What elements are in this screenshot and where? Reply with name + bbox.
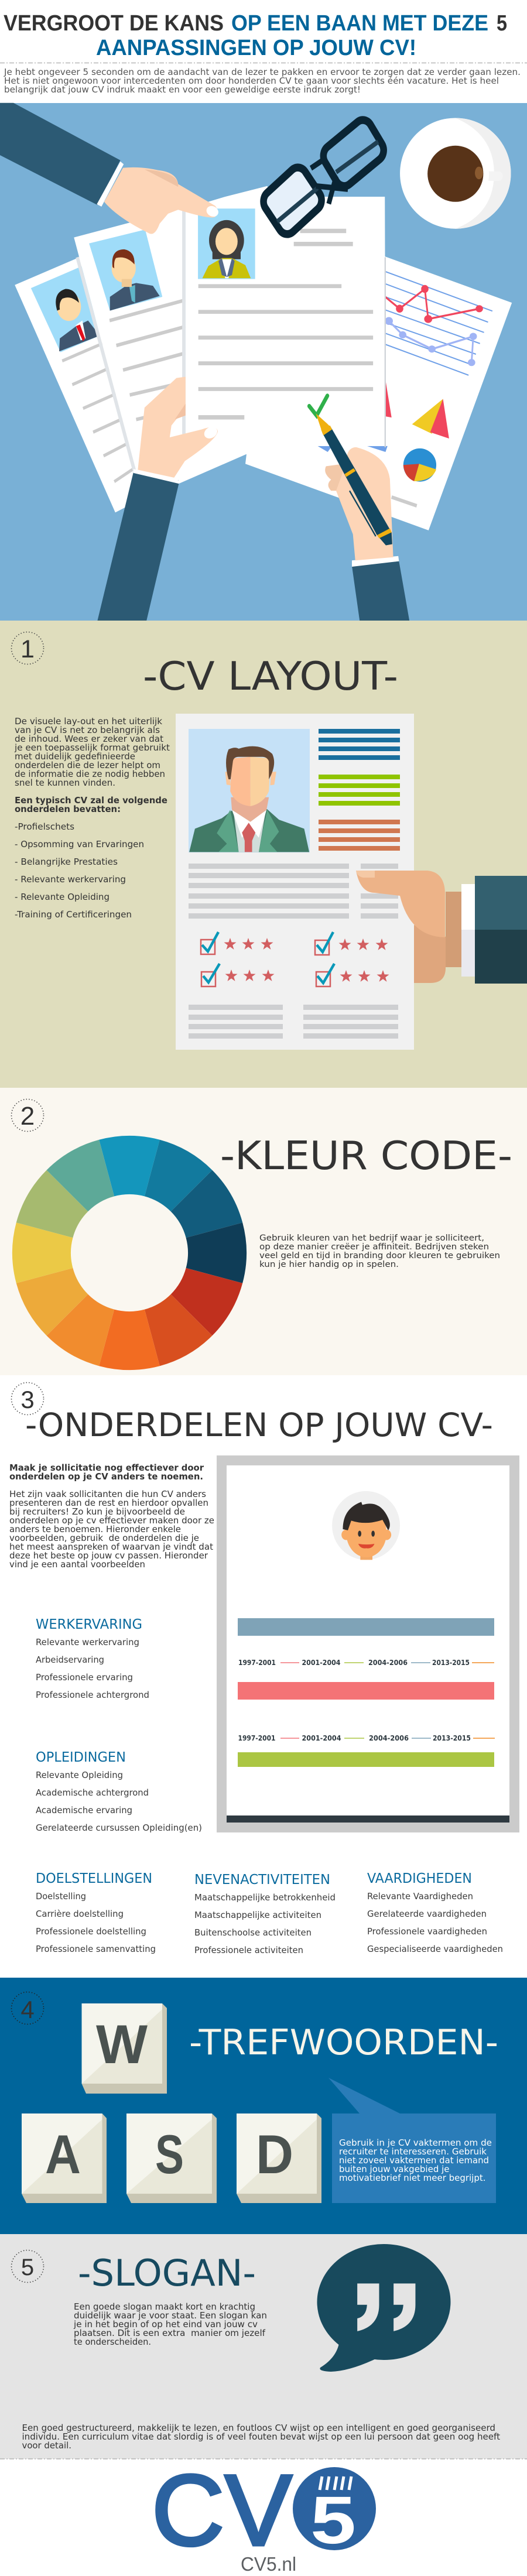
- text block: slogan: plaatsen. Dit is een extra manier om jezelf: [74, 2328, 266, 2338]
- timeline 2: 2001-2004: [302, 1734, 341, 1742]
- text block: layout intro: -Profielschets: [15, 821, 74, 832]
- heading: onderdelen: -ONDERDELEN OP JOUW CV-: [25, 1406, 493, 1444]
- number badge 4: 4: [20, 1996, 35, 2023]
- number badge 3: [12, 1383, 43, 1414]
- text block: layout intro: je een toepasselijk format gebruikt: [14, 742, 170, 753]
- icon: avatar: [332, 1491, 400, 1560]
- text block: onderdelen intro: voorbeelden, gebruik de onderdelen die je: [9, 1533, 199, 1543]
- icon: glasses: [260, 116, 387, 239]
- text block: colour advice: Gebruik kleuren van het bedrijf waar je solliciteert,: [259, 1234, 484, 1243]
- paper: right chart sheet: [245, 256, 512, 530]
- timeline 2: 2004-2006: [369, 1734, 409, 1742]
- panel: section 4 trefwoorden: [0, 1978, 527, 2234]
- icon: speech bubble with quotes: [317, 2244, 451, 2372]
- text block: layout intro: onderdelen bevatten:: [15, 804, 121, 814]
- intro text: [4, 67, 521, 95]
- text block: layout intro: onderdelen die de lezer helpt om: [15, 760, 160, 770]
- text block: onderdelen intro: onderdelen op je CV anders te noemen.: [9, 1471, 203, 1482]
- list: doelstellingen: [36, 1871, 156, 1954]
- paper: main CV sheet: [174, 186, 386, 484]
- title: VERGROOT DE KANS: [4, 11, 224, 36]
- hand: pointing from top left: [0, 103, 220, 234]
- text block: layout intro: -Training of Certificeringen: [15, 909, 132, 920]
- text block: onderdelen intro: vind je een aantal voorbeelden: [9, 1559, 145, 1570]
- text block: onderdelen intro: deze het beste op jouw cv passen. Hieronder: [9, 1550, 208, 1561]
- number badge 5: [12, 2250, 43, 2282]
- panel: section 3 onderdelen: [9, 1383, 519, 1955]
- portrait: man in green suit: [189, 729, 310, 852]
- text block: layout intro: de informatie die ze nodig hebben: [15, 769, 165, 779]
- list: nevenactiviteiten: Buitenschoolse activiteiten: [194, 1927, 312, 1938]
- text block: onderdelen intro: anders te benoemen. Hieronder enkele: [9, 1524, 181, 1534]
- text block: slogan: duidelijk waar je voor staat. Een slogan kan: [74, 2310, 267, 2321]
- text block: layout intro: De visuele lay-out en het uiterlijk: [15, 716, 162, 727]
- paper: middle CV: [74, 208, 186, 471]
- text block: layout intro: de inhoud. Wees er zeker van dat: [15, 734, 163, 744]
- key D: D: [256, 2123, 293, 2185]
- icon: coffee cup: [400, 118, 511, 229]
- title: 5: [497, 11, 507, 36]
- number badge 1: 1: [20, 635, 35, 663]
- key D: [237, 2113, 321, 2203]
- colored text bars: [319, 729, 400, 851]
- callout: vaktermen: [328, 2078, 496, 2203]
- text block: layout intro: - Relevante Opleiding: [15, 892, 109, 902]
- text block: layout intro: - Belangrijke Prestaties: [15, 857, 118, 867]
- intro text: Je hebt ongeveer 5 seconden om de aandacht van de lezer te pakken en ervoor te zorgen dat ze verder gaan lezen.: [4, 67, 521, 77]
- list: opleidingen: [36, 1750, 202, 1833]
- heading: slogan: -SLOGAN-: [78, 2252, 256, 2294]
- text block: onderdelen intro: onderdelen op je cv effectiever maken door ze: [9, 1515, 214, 1526]
- timeline 1: 1997-2001: [238, 1658, 276, 1667]
- logo: CV5: C: [152, 2454, 224, 2567]
- list: nevenactiviteiten: Maatschappelijke betrokkenheid: [194, 1892, 336, 1903]
- text block: slogan: [73, 2301, 267, 2347]
- list: vaardigheden: VAARDIGHEDEN: [367, 1871, 472, 1886]
- donut colour wheel: [12, 1136, 247, 1370]
- key A: A: [45, 2123, 81, 2185]
- list: werkervaring: [36, 1617, 149, 1700]
- panel: hero illustration: [0, 103, 527, 621]
- icon: check mark: [309, 396, 327, 416]
- portrait: woman: [198, 208, 255, 279]
- list: werkervaring: WERKERVARING: [36, 1617, 142, 1632]
- text block: layout intro: - Relevante werkervaring: [15, 874, 126, 885]
- list: vaardigheden: Gerelateerde vaardigheden: [367, 1909, 487, 1919]
- text block: colour advice: [259, 1234, 500, 1269]
- key S: [126, 2113, 217, 2203]
- text block: slogan: te onderscheiden.: [74, 2337, 151, 2347]
- text block: colour advice: op deze manier creëer je affiniteit. Bedrijven steken: [259, 1242, 489, 1252]
- logo: CV5: [152, 2454, 376, 2575]
- timeline 1: [238, 1658, 494, 1667]
- number badge 2: 2: [20, 1102, 35, 1131]
- panel: section 1 CV layout: [0, 621, 527, 1088]
- logo: CV5: V: [225, 2454, 292, 2567]
- text block: onderdelen intro: Maak je sollicitatie nog effectiever door: [9, 1462, 204, 1473]
- panel: section 2 colour code: [0, 1088, 527, 1375]
- list: doelstellingen: Carrière doelstelling: [36, 1909, 124, 1919]
- callout: vaktermen: motivatiebrief niet meer begrijpt.: [339, 2173, 486, 2183]
- key A: [22, 2113, 107, 2203]
- list: werkervaring: Arbeidservaring: [36, 1654, 104, 1665]
- text block: closing: Een goed gestructureerd, makkelijk te lezen, en foutloos CV wijst op een intelligent en goed georganiseerd: [22, 2423, 495, 2433]
- list: vaardigheden: [367, 1871, 503, 1954]
- text block: onderdelen intro: Het zijn vaak sollicitanten die hun CV anders: [9, 1489, 206, 1499]
- list: werkervaring: Relevante werkervaring: [36, 1637, 139, 1647]
- number badge 5: 5: [21, 2255, 34, 2280]
- grey text bars: [189, 864, 398, 1039]
- text block: slogan: je in het begin of op het eind van jouw cv: [73, 2319, 258, 2330]
- hand: writing with pen: [316, 413, 409, 621]
- list: nevenactiviteiten: NEVENACTIVITEITEN: [194, 1872, 330, 1888]
- list: vaardigheden: Professionele vaardigheden: [367, 1926, 487, 1937]
- timeline 1: 2001-2004: [302, 1658, 341, 1667]
- intro text: Het is niet ongewoon voor intercedenten om door honderden CV te gaan voor slechts één vacature. Het is heel: [4, 76, 499, 86]
- list: doelstellingen: DOELSTELLINGEN: [36, 1871, 152, 1886]
- text block: slogan: Een goede slogan maakt kort en krachtig: [74, 2301, 255, 2312]
- timeline 2: [238, 1734, 495, 1742]
- text block: onderdelen intro: [9, 1462, 214, 1570]
- callout: vaktermen: recruiter te interesseren. Gebruik: [339, 2146, 487, 2157]
- checkmarks and stars: [201, 932, 389, 986]
- title: AANPASSINGEN OP JOUW CV!: [96, 36, 416, 60]
- text block: layout intro: - Opsomming van Ervaringen: [15, 839, 144, 849]
- list: opleidingen: Relevante Opleiding: [36, 1770, 123, 1780]
- illustration: CV sheet held by hand: [176, 714, 527, 1050]
- list: vaardigheden: Gespecialiseerde vaardigheden: [367, 1944, 503, 1954]
- text block: onderdelen intro: het meest aanspreken of waarvan je vindt dat: [9, 1542, 213, 1552]
- list: opleidingen: Academische achtergrond: [36, 1787, 149, 1798]
- list: doelstellingen: Doelstelling: [36, 1891, 86, 1902]
- list: opleidingen: Gerelateerde cursussen Opleiding(en): [36, 1823, 202, 1833]
- timeline 1: 2004-2006: [368, 1658, 408, 1667]
- text block: closing: individu. Een curriculum vitae dat slordig is of veel fouten bevat wijst op een lui persoon dat geen oog heeft: [22, 2431, 500, 2442]
- CV mockup frame: [217, 1455, 519, 1832]
- text block: onderdelen intro: presenteren dan de rest en hierdoor opvallen: [9, 1498, 208, 1508]
- logo: CV5: CV5.nl: [241, 2553, 296, 2575]
- heading: trefwoorden: -TREFWOORDEN-: [189, 2022, 498, 2063]
- title: OP EEN BAAN MET DEZE: [231, 11, 488, 36]
- list: doelstellingen: Professionele samenvatting: [36, 1944, 156, 1954]
- number badge 4: [12, 1992, 43, 2025]
- text block: colour advice: kun je hier handig op in spelen.: [259, 1260, 399, 1269]
- text block: layout intro: Een typisch CV zal de volgende: [15, 795, 167, 806]
- panel: header: [0, 11, 527, 95]
- heading: kleur code: -KLEUR CODE-: [220, 1133, 512, 1179]
- panel: section 5 slogan: [0, 2234, 527, 2459]
- key W: W: [96, 2013, 148, 2075]
- callout: vaktermen: Gebruik in je CV vaktermen om de: [339, 2137, 492, 2148]
- logo: CV5: 5: [310, 2483, 356, 2558]
- title: [4, 11, 507, 60]
- text block: onderdelen intro: bij recruiters! Zo kun je bijvoorbeeld de: [9, 1506, 185, 1517]
- list: nevenactiviteiten: Professionele activiteiten: [194, 1945, 303, 1955]
- list: nevenactiviteiten: [194, 1872, 336, 1955]
- list: nevenactiviteiten: Maatschappelijke activiteiten: [194, 1910, 321, 1920]
- text block: layout intro: snel te kunnen vinden.: [15, 777, 115, 788]
- hand: holding paper bottom left: [97, 377, 218, 621]
- number badge 3: 3: [20, 1386, 35, 1413]
- list: werkervaring: Professionele achtergrond: [36, 1690, 149, 1700]
- list: doelstellingen: Professionele doelstelling: [36, 1926, 146, 1937]
- timeline 1: 2013-2015: [432, 1658, 470, 1667]
- intro text: belangrijk dat jouw CV indruk maakt en voor een geweldige eerste indruk zorgt!: [4, 84, 361, 95]
- key W: [82, 2003, 167, 2094]
- number badge 2: [12, 1099, 43, 1131]
- list: werkervaring: Professionele ervaring: [36, 1672, 133, 1683]
- timeline 2: 2013-2015: [433, 1734, 471, 1742]
- icon: fountain pen: [316, 413, 392, 546]
- paper: back left CV: [15, 255, 188, 512]
- text block: layout intro: [14, 716, 170, 920]
- number badge 1: [12, 632, 43, 664]
- hand holding sheet: [356, 871, 527, 984]
- callout: vaktermen: buiten jouw vakgebied je: [339, 2164, 450, 2174]
- text block: colour advice: veel geld en tijd in branding door kleuren te gebruiken: [259, 1251, 500, 1260]
- callout: vaktermen: niet zoveel vaktermen dat iemand: [339, 2155, 489, 2166]
- key S: S: [155, 2123, 184, 2185]
- timeline 2: 1997-2001: [238, 1734, 275, 1742]
- text block: closing: voor detail.: [22, 2440, 71, 2451]
- heading: CV layout: -CV LAYOUT-: [143, 653, 398, 699]
- list: vaardigheden: Relevante Vaardigheden: [367, 1891, 473, 1902]
- text block: closing: [22, 2423, 500, 2451]
- list: opleidingen: OPLEIDINGEN: [36, 1750, 126, 1765]
- list: opleidingen: Academische ervaring: [36, 1805, 132, 1815]
- text block: layout intro: van je CV is net zo belangrijk als: [15, 725, 160, 735]
- text block: layout intro: met duidelijk gedefinieerde: [15, 751, 135, 762]
